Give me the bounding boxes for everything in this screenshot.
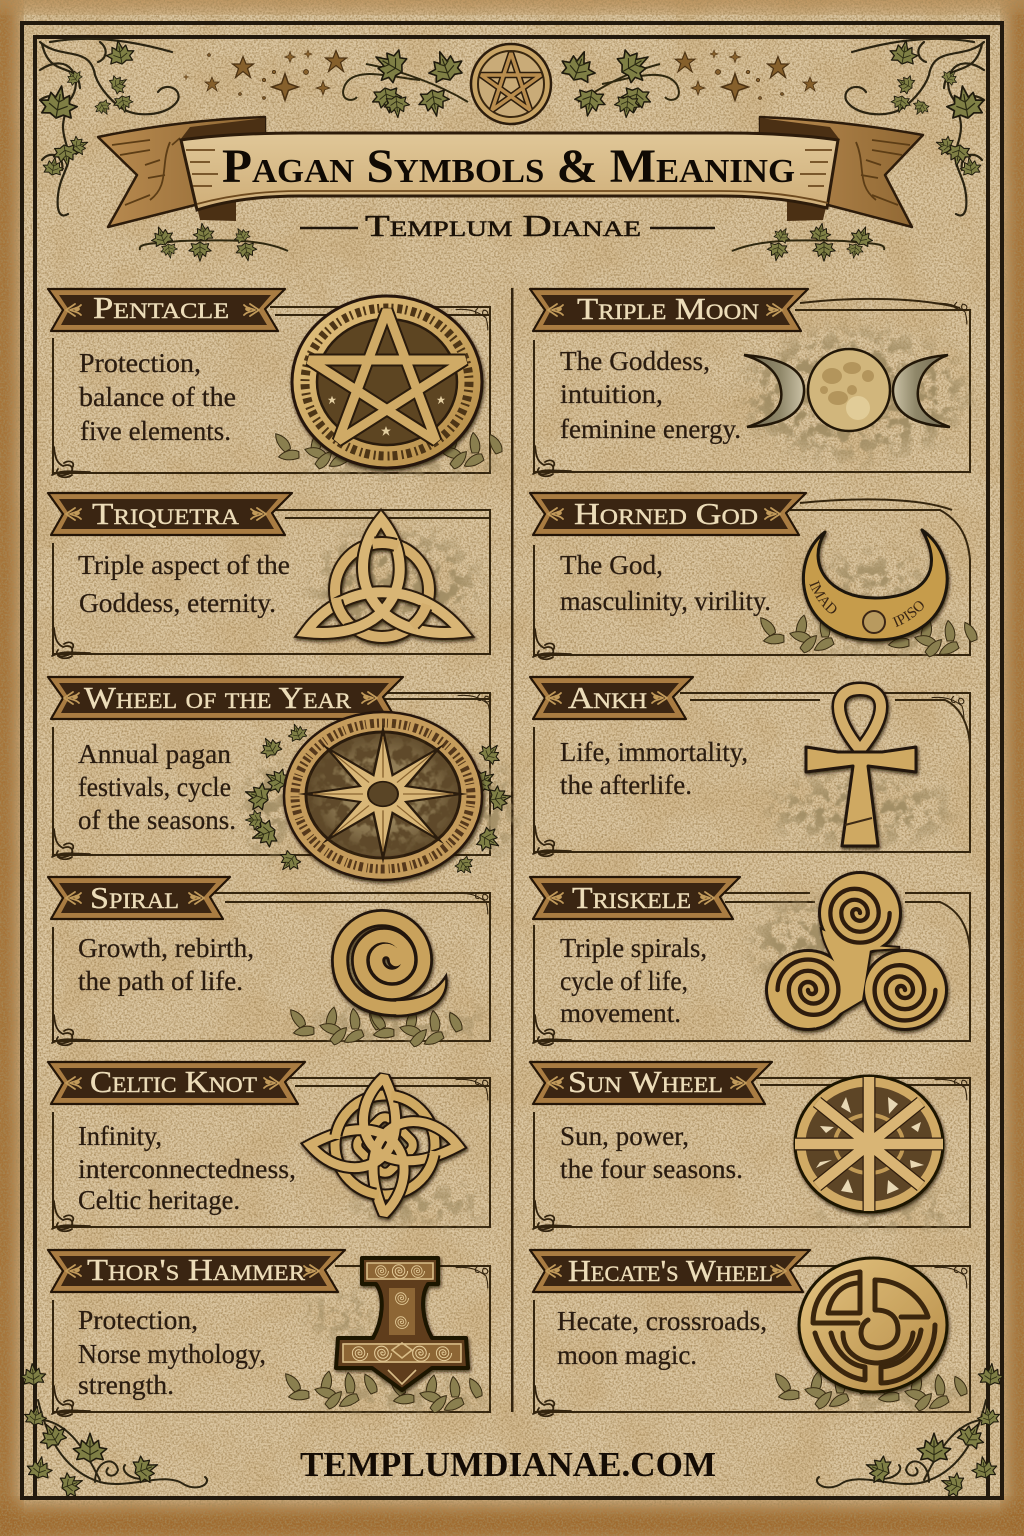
panel: Triquetra [48,493,490,658]
banner: Thor's Hammer [87,1252,305,1287]
banner: Pentacle [93,290,229,325]
banner [530,1250,810,1292]
banner [48,289,285,331]
banner: Triple Moon [577,291,759,326]
banner [48,1062,305,1104]
icon: celtic knot [310,1077,458,1214]
frame [534,1266,970,1412]
banner [48,493,292,535]
description: Protection, [78,1305,198,1335]
description [557,1306,767,1370]
ribbon lower hem [186,150,832,204]
frame [534,499,970,655]
ribbon main band [181,133,838,210]
description: the four seasons. [560,1154,743,1184]
icon: triple moon [744,349,950,431]
description: Goddess, eternity. [79,588,276,618]
icon: spiral [340,918,446,1016]
banner: Hecate's Wheel [568,1253,773,1288]
description: Hecate, crossroads, [557,1306,767,1336]
description [560,346,741,444]
description: interconnectedness, [78,1154,296,1184]
frame [53,893,490,1041]
description [78,739,236,835]
icon: triskele [767,873,946,1029]
description: Norse mythology, [78,1339,266,1369]
panel: Wheel of the Year [48,677,513,880]
icon: ankh [806,689,916,846]
banner: Triquetra [92,496,239,531]
corner vines top right [845,38,987,216]
description: Growth, rebirth, [78,933,254,963]
title ribbon [98,117,923,227]
description: Annual pagan [78,739,232,769]
banner [530,493,806,535]
frame [53,307,490,473]
frame [53,1078,490,1227]
frame [534,1078,970,1227]
description: of the seasons. [78,805,236,835]
centre column divider [511,288,514,1412]
banner: Celtic Knot [90,1064,258,1099]
banner [48,877,230,919]
banner: Horned God [574,496,758,531]
panel: Spiral [48,877,490,1051]
frame [53,1266,490,1412]
description: the path of life. [78,966,243,996]
corner vines bottom left [20,1362,207,1500]
description: feminine energy. [560,414,741,444]
panel: Pentacle [48,289,507,477]
icon: horned god crescent: IPISO [892,601,924,628]
icon: hecate's wheel [799,1258,947,1392]
icon: wheel of the year [284,712,482,880]
stars ornament right [675,50,817,100]
description: festivals, cycle [78,772,231,802]
icon: sun wheel [795,1076,943,1212]
title text: Pagan Symbols & Meaning [222,140,795,193]
description: movement. [560,998,681,1028]
banner: Spiral [90,880,179,915]
frame [53,510,490,654]
banner: Triskele [572,880,691,915]
banner: Sun Wheel [568,1064,723,1099]
icon: pentacle [292,296,482,468]
description: The God, [560,550,663,580]
full moon [808,349,890,431]
banner [530,877,740,919]
frame [53,693,490,855]
foliage sprig right [732,221,884,263]
description: The Goddess, [560,346,710,376]
panel: Ankh [530,677,970,856]
description: five elements. [80,416,231,446]
icon: thor's hammer [336,1258,468,1390]
description [560,550,771,616]
banner [48,677,403,719]
top centre pentacle emblem with foliage [343,42,679,124]
banner [530,677,693,719]
frame [534,299,970,472]
banner [530,1062,772,1104]
description: balance of the [79,382,236,412]
description [78,1121,296,1215]
banner: Ankh [568,680,647,715]
description: masculinity, virility. [560,586,771,616]
description: Triple aspect of the [78,550,290,580]
description: the afterlife. [560,770,692,800]
icon: horned god crescent: IMAD [809,580,836,614]
description [78,1305,266,1400]
description: Infinity, [78,1121,162,1151]
corner vines bottom right [817,1362,1004,1500]
banner [48,1250,345,1292]
description [79,348,236,446]
description: Triple spirals, [560,933,707,963]
icon: horned god crescent [800,528,952,646]
left crescent [744,355,804,427]
description [560,1121,743,1184]
panel: Hecate's Wheel [530,1250,972,1416]
panel: Sun Wheel [530,1062,970,1231]
ribbon left tail [98,117,265,227]
description: Celtic heritage. [78,1185,240,1215]
banner [530,289,808,331]
corner vines top left [37,38,179,216]
banner: Wheel of the Year [84,680,351,715]
description [78,550,290,618]
description: moon magic. [557,1340,697,1370]
panel: Horned God [528,492,978,660]
description: Life, immortality, [560,737,748,767]
tail vine etchings [112,138,910,205]
ribbon right tail [760,117,923,227]
panel: Celtic Knot [48,1062,490,1231]
stars ornament left [183,50,346,100]
icon: triquetra [306,519,462,637]
footer website: TEMPLUMDIANAE.COM [300,1445,716,1484]
description: Sun, power, [560,1121,689,1151]
description [560,737,748,800]
panel: Triskele [530,873,970,1045]
tail fold shadows [180,118,840,221]
description [560,933,707,1028]
panel: Thor's Hammer [48,1250,490,1417]
description: intuition, [560,379,663,409]
description: strength. [78,1370,174,1400]
foliage sprig left [140,221,288,263]
frame [534,693,970,852]
subtitle: Templum Dianae [365,208,641,243]
description: Protection, [79,348,201,378]
description [78,933,254,996]
panel: Triple Moon [530,289,970,476]
description: cycle of life, [560,966,688,996]
right crescent [893,355,950,427]
frame [534,893,970,1041]
foliage behind wheel [241,721,513,879]
